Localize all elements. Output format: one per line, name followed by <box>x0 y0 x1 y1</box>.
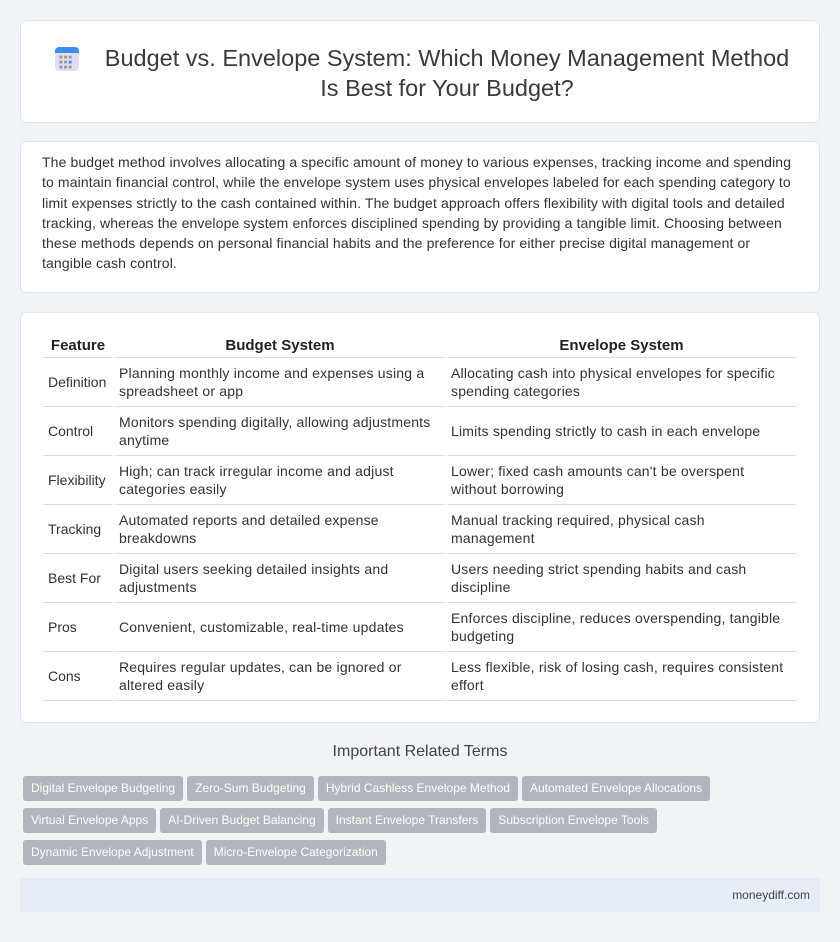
comparison table: Control <box>48 423 93 439</box>
related terms tags: Micro-Envelope Categorization <box>214 845 378 859</box>
comparison table: Requires regular updates, can be ignored or altered easily <box>119 659 402 693</box>
comparison table: Users needing strict spending habits and cash discipline <box>451 561 746 595</box>
comparison table: Definition <box>48 374 106 390</box>
comparison table: Envelope System <box>559 336 684 354</box>
related terms tags: Instant Envelope Transfers <box>336 813 478 827</box>
comparison table: Feature <box>51 336 105 354</box>
comparison table: Budget System <box>225 336 335 354</box>
related terms tags: AI-Driven Budget Balancing <box>168 813 316 827</box>
comparison table: Enforces discipline, reduces overspending, tangible budgeting <box>451 610 780 644</box>
related terms tags: Dynamic Envelope Adjustment <box>31 845 194 859</box>
comparison table: Pros <box>48 619 77 635</box>
comparison table: Allocating cash into physical envelopes for specific spending categories <box>451 365 775 399</box>
comparison table: Manual tracking required, physical cash management <box>451 512 705 546</box>
title: Budget vs. Envelope System: Which Money Management Method <box>105 45 789 71</box>
title: Is Best for Your Budget? <box>320 75 574 101</box>
related terms tags: Virtual Envelope Apps <box>31 813 148 827</box>
comparison table <box>20 312 820 723</box>
related terms tags: Automated Envelope Allocations <box>530 781 702 795</box>
related terms tags: Hybrid Cashless Envelope Method <box>326 781 510 795</box>
related terms tags: Subscription Envelope Tools <box>498 813 649 827</box>
comparison table: Convenient, customizable, real-time updates <box>119 619 404 635</box>
comparison table: Monitors spending digitally, allowing adjustments anytime <box>119 414 430 448</box>
comparison table: Less flexible, risk of losing cash, requires consistent effort <box>451 659 783 693</box>
footer: moneydiff.com <box>732 888 810 902</box>
related terms heading: Important Related Terms <box>333 743 507 760</box>
comparison table: Best For <box>48 570 101 586</box>
intro text: The budget method involves allocating a specific amount of money to various expenses, tracking income and spending to maintain financial control, while the envelope system uses physical envelopes labeled for each spending category to limit expenses strictly to the cash contained within. The budget approach offers flexibility with digital tools and detailed tracking, whereas the envelope system enforces disciplined spending by providing a tangible limit. Choosing between these methods depends on personal financial habits and the preference for either precise digital management or tangible cash control. <box>42 154 791 271</box>
related terms tags: Digital Envelope Budgeting <box>31 781 175 795</box>
icon: calendar: ■■■ <box>59 55 73 61</box>
comparison table: Automated reports and detailed expense breakdowns <box>119 512 379 546</box>
comparison table: Lower; fixed cash amounts can't be overspent without borrowing <box>451 463 744 497</box>
comparison table: Flexibility <box>48 472 106 488</box>
icon: calendar: ■■■ <box>59 65 73 71</box>
related terms tags <box>23 776 710 865</box>
comparison table: Tracking <box>48 521 101 537</box>
related terms tags: Zero-Sum Budgeting <box>195 781 306 795</box>
comparison table: Limits spending strictly to cash in each envelope <box>451 423 760 439</box>
comparison table: Digital users seeking detailed insights and adjustments <box>119 561 388 595</box>
title card <box>20 20 820 123</box>
title <box>105 45 789 101</box>
comparison table: Cons <box>48 668 81 684</box>
comparison table: Planning monthly income and expenses using a spreadsheet or app <box>119 365 424 399</box>
icon: calendar <box>55 47 79 71</box>
icon: calendar: ■■■ <box>59 60 73 66</box>
footer <box>20 878 820 912</box>
comparison table: High; can track irregular income and adjust categories easily <box>119 463 394 497</box>
